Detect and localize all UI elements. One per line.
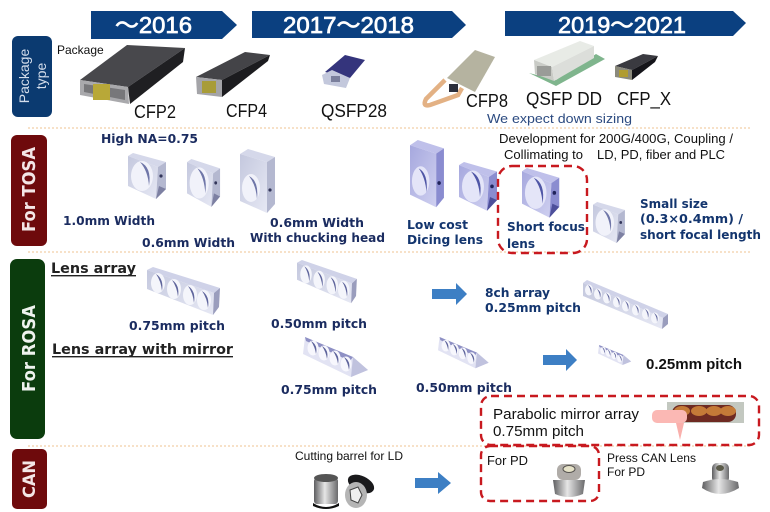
highlight: parabolic mirror array: Parabolic mirror array [493, 406, 640, 423]
lens array: 8ch 0.25mm pitch: 8ch array [485, 286, 550, 300]
caption: press CAN lens: For PD [607, 465, 645, 479]
lens: 0.6mm width with chucking head: 0.6mm Width [270, 216, 364, 230]
lens: small size: Small size [640, 197, 708, 211]
lens: low cost dicing: Dicing lens [407, 233, 483, 247]
note: down sizing: We expect down sizing [487, 111, 632, 126]
row label: For ROSA: For ROSA [19, 305, 40, 392]
lens: 0.6mm width with chucking head [240, 149, 385, 245]
caption: High NA: High NA=0.75 [101, 132, 198, 146]
highlight: parabolic mirror array: 0.75mm pitch [493, 423, 584, 440]
module: CFP8 [425, 50, 508, 111]
arrow to 0.25mm mirror array [543, 349, 577, 371]
mirror array: 0.25mm pitch [598, 345, 742, 373]
arrow to PD lens [415, 472, 451, 494]
lens: low cost dicing: Low cost [407, 218, 468, 232]
row label: Package type: Package [16, 49, 32, 103]
lens: 0.6mm width: 0.6mm Width [142, 236, 235, 250]
highlight: for PD [481, 446, 599, 501]
timeline arrow: ~2016 [91, 11, 237, 39]
row label: For ROSA [10, 259, 45, 439]
row label: Package type [12, 36, 52, 117]
note: development for 200G/400G: Collimating to [504, 148, 583, 162]
module: CFP_X [615, 54, 671, 110]
timeline arrow: 2017~2018: 2017〜2018 [283, 12, 414, 38]
lens array: 0.50mm pitch [271, 260, 367, 331]
lens: 0.6mm width [142, 159, 235, 250]
highlight: for PD: For PD [487, 453, 528, 468]
module: QSFP DD [526, 41, 605, 109]
mirror array: 0.50mm pitch [416, 337, 512, 395]
icon: press CAN lens [702, 463, 739, 494]
row label: For TOSA: For TOSA [19, 147, 40, 232]
row label: CAN [12, 449, 47, 509]
module: CFP8: CFP8 [466, 91, 508, 111]
note: development for 200G/400G: Development for 200G/400G, Coupling / [499, 132, 734, 146]
lens array: 0.75mm pitch: 0.75mm pitch [129, 319, 225, 333]
caption: press CAN lens: Press CAN Lens [607, 451, 696, 465]
module: CFP2: CFP2 [134, 102, 176, 122]
lens array: 8ch 0.25mm pitch: 0.25mm pitch [485, 301, 581, 315]
highlight: short focus lens [498, 166, 587, 253]
highlight: short focus lens: Short focus [507, 220, 585, 234]
timeline arrow: 2017~2018 [252, 11, 466, 38]
lens: 0.6mm width with chucking head: With chucking head [250, 231, 385, 245]
mirror array: 0.25mm pitch: 0.25mm pitch [646, 356, 742, 373]
note: development for 200G/400G [499, 132, 734, 162]
timeline arrow: 2019~2021: 2019〜2021 [558, 12, 686, 38]
module: QSFP28 [321, 55, 387, 121]
highlight: parabolic mirror array [481, 396, 759, 445]
module: CFP_X: CFP_X [617, 89, 671, 110]
highlight: short focus lens: lens [507, 237, 535, 251]
row label: Package type: type [33, 63, 49, 89]
timeline arrow: 2019~2021 [505, 11, 746, 38]
module: CFP4 [196, 52, 270, 121]
caption: cutting barrel: Cutting barrel for LD [295, 449, 403, 463]
lens: 1.0mm width: 1.0mm Width [63, 214, 155, 228]
note: development for 200G/400G: LD, PD, fiber and PLC [597, 148, 725, 162]
icon: parabolic mirror with beam [652, 402, 744, 440]
module: CFP4: CFP4 [226, 101, 267, 121]
lens array: 8ch 0.25mm pitch [485, 280, 668, 329]
module: QSFP28: QSFP28 [321, 101, 387, 121]
lens: small size [593, 197, 761, 243]
mirror array: 0.50mm pitch: 0.50mm pitch [416, 381, 512, 395]
lens array: 0.50mm pitch: 0.50mm pitch [271, 317, 367, 331]
mirror array: 0.75mm pitch: 0.75mm pitch [281, 383, 377, 397]
icon: cutting barrels [313, 471, 377, 509]
lens: small size: (0.3×0.4mm) / [640, 212, 744, 226]
module: QSFP DD: QSFP DD [526, 89, 602, 109]
caption: press CAN lens [607, 451, 696, 479]
mirror array: 0.75mm pitch [281, 337, 377, 397]
package caption: Package [57, 43, 104, 57]
heading: Lens array: Lens array [51, 261, 136, 277]
row label: For TOSA [11, 135, 47, 246]
lens: small size: short focal length [640, 228, 761, 242]
lens: low cost dicing [407, 140, 497, 247]
timeline arrow: ~2016: 〜2016 [115, 12, 192, 38]
lens array: 0.75mm pitch [129, 267, 225, 333]
heading: Lens array with mirror: Lens array with mirror [52, 342, 233, 358]
lens: 1.0mm width [63, 153, 166, 228]
row label: CAN: CAN [20, 460, 40, 498]
arrow to 8ch array [432, 283, 467, 305]
icon: PD CAN lens [553, 464, 585, 497]
module: CFP2 [80, 45, 185, 122]
